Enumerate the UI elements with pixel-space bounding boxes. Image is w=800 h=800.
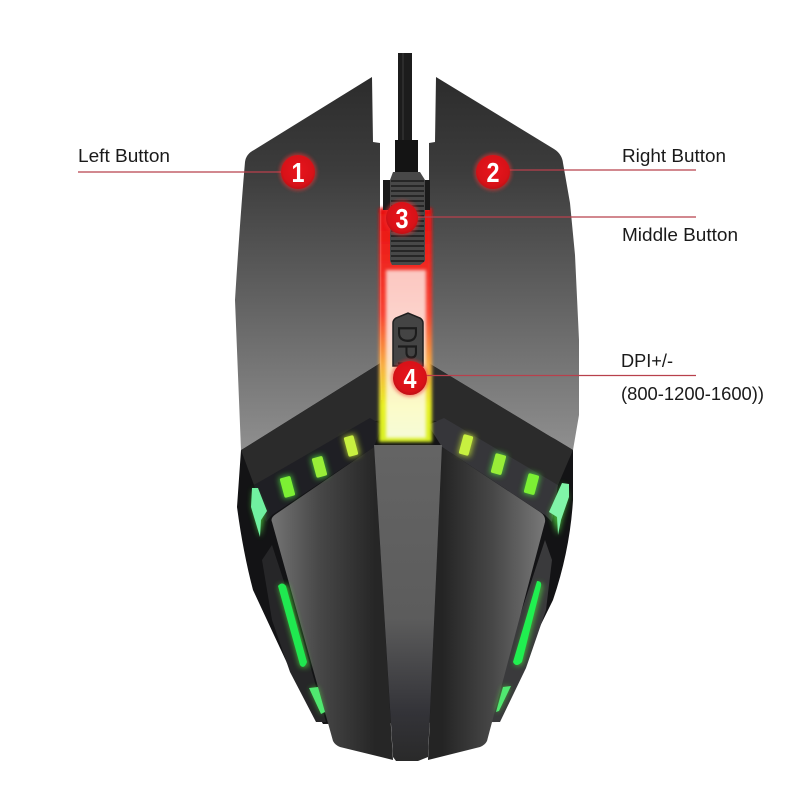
callout line: left button bbox=[78, 171, 285, 173]
scroll wheel bbox=[383, 140, 430, 265]
callout line: middle button bbox=[415, 216, 696, 218]
badge 3: 3 bbox=[396, 203, 408, 234]
green LEDs bbox=[251, 433, 569, 714]
side trim right bbox=[490, 540, 552, 722]
mouse cable bbox=[398, 53, 412, 145]
left button bbox=[235, 77, 380, 450]
lower shell bbox=[237, 400, 573, 724]
left dark chevron bbox=[241, 363, 382, 485]
badge 1: 1 bbox=[292, 157, 304, 188]
badge 1 bbox=[279, 153, 317, 191]
label: left button: Left Button bbox=[78, 145, 170, 166]
badge 2: 2 bbox=[486, 157, 500, 188]
callout line: DPI bbox=[425, 374, 696, 376]
right button bbox=[429, 77, 579, 450]
centre palm panel bbox=[374, 445, 442, 761]
right palm panel bbox=[428, 447, 545, 760]
right dark chevron bbox=[428, 363, 573, 485]
badge 4: 4 bbox=[404, 363, 417, 394]
light column bbox=[379, 208, 432, 442]
label: middle button: Middle Button bbox=[622, 224, 738, 245]
right LED strip bbox=[428, 418, 558, 522]
side trim left bbox=[262, 545, 326, 722]
left LED strip bbox=[254, 418, 382, 522]
badge 2 bbox=[474, 153, 512, 191]
badge 4 bbox=[391, 359, 429, 397]
label: DPI range: (800-1200-1600)) bbox=[621, 383, 764, 404]
DPI button: DPI bbox=[392, 325, 423, 367]
left palm panel bbox=[272, 447, 393, 760]
label: DPI: DPI+/- bbox=[621, 350, 673, 371]
mouse body illustration bbox=[235, 77, 579, 761]
label: right button: Right Button bbox=[622, 145, 726, 166]
LED glow layer bbox=[252, 433, 568, 713]
callout line: right button bbox=[505, 169, 696, 171]
badge 3 bbox=[384, 200, 420, 236]
